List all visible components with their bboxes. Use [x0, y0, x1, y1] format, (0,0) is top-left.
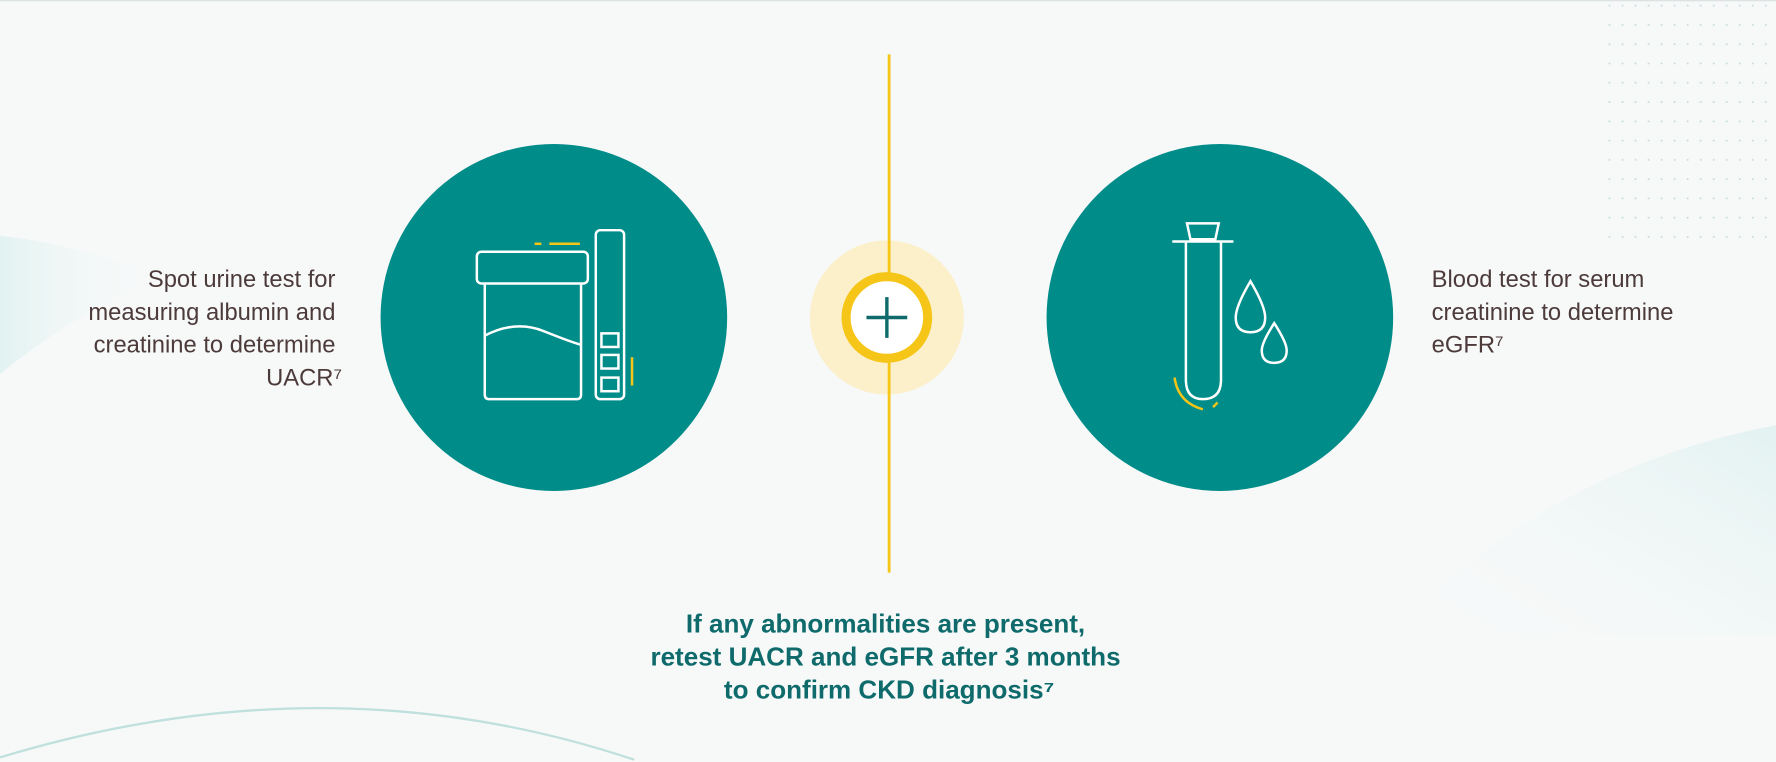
vertical divider line: [888, 54, 890, 573]
text: blood test description: Blood test for serum: [1432, 266, 1644, 293]
text: blood test description: eGFR⁷: [1432, 332, 1504, 359]
text: bottom conclusion: to confirm CKD diagnosis⁷: [724, 674, 1054, 705]
icon: urine jar and strip: [477, 230, 632, 399]
text: blood test description: creatinine to determine: [1432, 299, 1673, 326]
text: urine test description: measuring albumin and: [88, 299, 335, 326]
text: bottom conclusion: If any abnormalities are present,: [686, 609, 1085, 639]
icon: test tube and drops: [1172, 223, 1287, 409]
text: urine test description: creatinine to determine: [94, 332, 335, 359]
right circle: blood test: [1047, 144, 1393, 491]
left circle: urine test: [381, 144, 727, 491]
plus icon: [810, 240, 964, 395]
text: bottom conclusion: retest UACR and eGFR after 3 months: [650, 642, 1121, 672]
text: urine test description: Spot urine test for: [148, 266, 336, 293]
text: urine test description: UACR⁷: [266, 365, 342, 392]
